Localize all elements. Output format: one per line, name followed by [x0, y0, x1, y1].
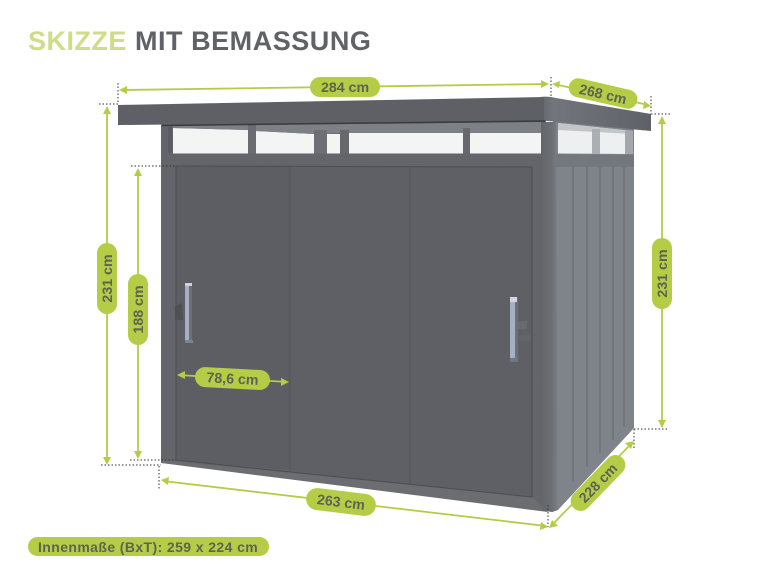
dimension: 78,6 cm — [177, 367, 289, 390]
shed front wall — [161, 120, 553, 512]
dimension: 284 cm — [119, 77, 549, 97]
dimension: 284 cm: 284 cm — [321, 80, 369, 96]
dimension: 268 cm — [552, 76, 651, 111]
side windows — [558, 123, 633, 154]
side wall panel grooves — [573, 167, 624, 482]
dimension: 228 cm: 228 cm — [576, 461, 621, 507]
handle right — [510, 297, 530, 362]
title: MIT BEMASSUNG — [135, 26, 371, 56]
title — [28, 26, 371, 56]
roof side — [540, 97, 651, 131]
dimension: 268 cm: 268 cm — [578, 82, 628, 108]
shed bottom rail — [161, 460, 548, 512]
shed corner post — [542, 122, 558, 512]
dimension: 263 cm: 263 cm — [316, 492, 366, 514]
handle left — [175, 283, 193, 343]
dimension: 228 cm — [549, 441, 634, 528]
title: SKIZZE — [28, 26, 127, 56]
door 1 — [176, 166, 289, 470]
dimension: 231 cm left: 231 cm — [100, 254, 116, 303]
roof front — [118, 97, 544, 125]
inner dimensions label: Innenmaße (BxT): 259 x 224 cm — [38, 539, 258, 555]
window reflections — [173, 122, 541, 134]
dimension: 231 cm right — [652, 116, 672, 428]
windows front — [173, 128, 541, 154]
shed illustration — [118, 97, 651, 512]
dimension: 231 cm left — [97, 106, 117, 465]
door seams — [176, 166, 532, 497]
dimension: 188 cm: 188 cm — [131, 285, 147, 334]
dimension: 263 cm — [161, 477, 548, 530]
side frame below window — [556, 154, 634, 167]
door 3 — [411, 167, 532, 497]
dimension: 231 cm right: 231 cm — [655, 249, 671, 298]
dimension: 188 cm — [128, 168, 148, 459]
door 2 — [291, 167, 409, 484]
shed side wall — [552, 120, 634, 512]
dotted reference lines — [99, 77, 671, 527]
window bars — [168, 126, 470, 154]
dimension: 78,6 cm: 78,6 cm — [206, 370, 259, 389]
